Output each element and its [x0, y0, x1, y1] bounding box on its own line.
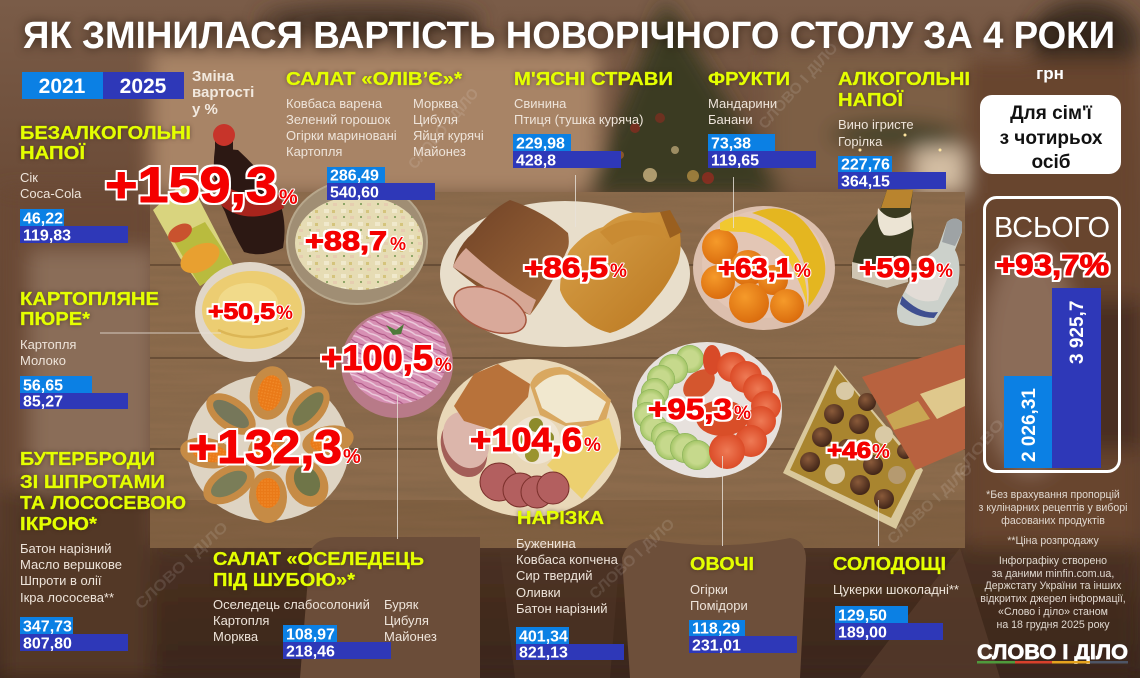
food: herring under fur coat bowl — [341, 310, 453, 418]
legend: change in percent: вартості — [192, 84, 254, 101]
panel: cold cuts: Сир твердий — [516, 568, 592, 583]
percent: vegetables +95,3: % — [734, 403, 751, 424]
percent: sweets +46: % — [872, 441, 890, 463]
panel: sweets: 129,50 — [838, 608, 887, 624]
panel: meat dishes — [513, 69, 673, 170]
panel: cold cuts: Батон нарізний — [516, 601, 608, 616]
panel: alcoholic drinks: НАПОЇ — [838, 90, 904, 110]
panel: total chart: +93,7% — [996, 250, 1109, 282]
percent: sweets +46 — [827, 437, 890, 463]
percent: olivier +88,7: +88,7 — [305, 226, 387, 256]
footnotes and sources: за даними minfin.com.ua, — [992, 568, 1114, 580]
panel: sandwiches: ЗІ ШПРОТАМИ — [20, 472, 165, 492]
panel: sandwiches: Ікра лососева** — [20, 590, 114, 605]
panel: olivier salad: Зелений горошок — [286, 112, 391, 127]
panel: herring salad: Оселедець слабосолоний — [213, 597, 370, 612]
panel: vegetables: 231,01 — [692, 638, 741, 654]
food: cola bottle — [212, 124, 285, 254]
panel: alcoholic drinks — [838, 69, 970, 190]
panel: fruit: ФРУКТИ — [708, 69, 790, 89]
panel: total chart — [984, 198, 1120, 472]
panel: total chart: ВСЬОГО — [994, 212, 1110, 244]
food: cold cuts platter — [432, 359, 621, 517]
percent: sweets +46: +46 — [827, 437, 871, 463]
panel: mashed potatoes: 85,27 — [23, 394, 63, 410]
panel: sandwiches: ІКРОЮ* — [20, 514, 97, 534]
footnotes and sources: Інфографіку створено — [999, 555, 1107, 567]
tree baubles and lights — [616, 113, 942, 184]
food: champagne bottle — [852, 190, 914, 288]
panel: alcoholic drinks: АЛКОГОЛЬНІ — [838, 69, 970, 89]
percent: meat +86,5: % — [610, 261, 627, 282]
panel: cold cuts: Буженина — [516, 536, 576, 551]
legend: years: 2021 — [39, 75, 86, 98]
panel: vegetables: 118,29 — [692, 620, 740, 638]
percent: fruit +63,1: % — [794, 261, 811, 282]
panel: alcoholic drinks: Вино ігристе — [838, 117, 914, 132]
panel: olivier salad: САЛАТ «ОЛІВ’Є»* — [286, 69, 462, 89]
panel: sweets: 189,00 — [838, 624, 887, 642]
percent: alcohol +59,9: +59,9 — [859, 253, 935, 283]
panel: mashed potatoes: Картопля — [20, 337, 76, 352]
panel: soft drinks: НАПОЇ — [20, 143, 86, 163]
panel: vegetables: ОВОЧІ — [690, 554, 754, 574]
panel: mashed potatoes: 56,65 — [23, 378, 63, 394]
percent: olivier +88,7: % — [390, 234, 406, 254]
chairs below the table — [300, 537, 1000, 678]
watermarks: Слово і діло — [132, 39, 1008, 613]
panel: olivier salad: Яйця курячі — [413, 128, 484, 143]
percent: soft drinks +159,3: % — [279, 186, 298, 209]
percent: fruit +63,1: +63,1 — [718, 253, 792, 283]
food: chocolate box — [783, 345, 965, 529]
percent: sandwiches +132,3: +132,3 — [188, 420, 342, 473]
panel: olivier salad: Картопля — [286, 144, 342, 159]
panel: vegetables: Огірки — [690, 582, 728, 597]
panel: sandwiches: БУТЕРБРОДИ — [20, 449, 155, 469]
panel: meat dishes: Свинина — [514, 96, 567, 111]
percent: meat +86,5: +86,5 — [524, 252, 608, 283]
percent: sandwiches +132,3: % — [343, 446, 361, 468]
panel: cold cuts: Оливки — [516, 585, 561, 600]
percent: herring salad +100,5: +100,5 — [321, 339, 433, 378]
panel: alcoholic drinks: Горілка — [838, 134, 883, 149]
watermarks: Слово і діло: СЛОВО І ДІЛО — [884, 460, 976, 548]
panel: herring salad: Морква — [213, 629, 259, 644]
panel: olivier salad: Майонез — [413, 144, 466, 159]
panel: sweets — [833, 554, 959, 642]
panel: sandwiches: Масло вершкове — [20, 557, 122, 572]
panel: herring salad: 108,97 — [286, 626, 335, 644]
footnotes and sources — [979, 489, 1127, 631]
panel: herring salad: Буряк — [384, 597, 419, 612]
unit label: грн — [1036, 64, 1064, 83]
footnotes and sources: фасованих продуктів — [1001, 515, 1105, 527]
card: for family of four: осіб — [1032, 152, 1070, 173]
panel: total chart: 3 925,7 — [1067, 301, 1088, 364]
title: ЯК ЗМІНИЛАСЯ ВАРТІСТЬ НОВОРІЧНОГО СТОЛУ ЗА 4 РОКИ — [23, 15, 1115, 57]
panel: mashed potatoes: КАРТОПЛЯНЕ — [20, 289, 159, 309]
footnotes and sources: *Без врахування пропорцій — [986, 489, 1120, 501]
panel: sandwiches — [20, 449, 186, 652]
legend: change in percent: у % — [192, 101, 218, 118]
table: wooden top — [150, 192, 965, 548]
panel: olivier salad: 286,49 — [330, 168, 379, 184]
panel: alcoholic drinks: 227,76 — [841, 156, 890, 174]
card: for family of four — [980, 95, 1121, 174]
panel: fruit: Банани — [708, 112, 753, 127]
food: vodka bottle — [897, 218, 962, 326]
panel: soft drinks: Coca-Cola — [20, 186, 82, 201]
food: juice carton — [153, 178, 233, 286]
footnotes and sources: «Слово і діло» станом — [998, 606, 1108, 618]
percent: mashed potatoes +50,5: +50,5 — [208, 299, 275, 324]
panel: olivier salad: Цибуля — [413, 112, 458, 127]
panel: sandwiches: Шпроти в олії — [20, 573, 102, 588]
watermarks: Слово і діло: СЛОВО — [950, 416, 1008, 481]
logo: Слово і діло: СЛОВО І ДІЛО — [977, 641, 1128, 664]
watermarks: Слово і діло: СЛОВО І ДІЛО — [755, 39, 842, 133]
leader lines — [100, 175, 878, 546]
panel: soft drinks — [20, 123, 191, 244]
panel: soft drinks: 119,83 — [23, 228, 71, 244]
panel: mashed potatoes — [20, 289, 159, 410]
panel: cold cuts — [516, 508, 624, 662]
panel: sandwiches: 807,80 — [23, 636, 72, 652]
watermarks: Слово і діло: СЛОВО І ДІЛО — [132, 518, 232, 613]
panel: herring salad: 218,46 — [286, 644, 335, 660]
panel: fruit: 73,38 — [711, 136, 751, 152]
percent: mashed potatoes +50,5 — [208, 299, 293, 324]
panel: cold cuts: Ковбаса копчена — [516, 552, 619, 567]
panel: meat dishes: 229,98 — [516, 136, 565, 152]
percent: herring salad +100,5: % — [435, 355, 452, 376]
panel: cold cuts: 401,34 — [519, 628, 568, 646]
footnotes and sources: Держстату України та інших — [985, 580, 1122, 592]
panel: olivier salad: 540,60 — [330, 184, 379, 202]
legend: years — [22, 72, 184, 99]
footnotes and sources: на 18 грудня 2025 року — [996, 619, 1110, 631]
food: canape plate — [178, 362, 357, 523]
card: for family of four: Для сім'ї — [1010, 103, 1093, 124]
footnotes and sources: відкритих джерел інформації, — [980, 593, 1126, 605]
panel: olivier salad: Ковбаса варена — [286, 96, 383, 111]
percent: soft drinks +159,3: +159,3 — [105, 157, 277, 213]
panel: soft drinks: БЕЗАЛКОГОЛЬНІ — [20, 123, 191, 143]
panel: cold cuts: НАРІЗКА — [517, 508, 604, 528]
percent: mashed potatoes +50,5: % — [276, 303, 293, 324]
panel: herring salad: Цибуля — [384, 613, 429, 628]
panel: mashed potatoes: ПЮРЕ* — [20, 309, 90, 329]
panel: herring salad: САЛАТ «ОСЕЛЕДЕЦЬ — [213, 549, 424, 569]
percent: alcohol +59,9: % — [936, 261, 953, 282]
panel: soft drinks: 46,22 — [23, 210, 63, 228]
legend: years: 2025 — [120, 75, 167, 98]
legend: change in percent: Зміна — [192, 68, 235, 85]
watermarks: Слово і діло: СЛОВО І ДІЛО — [405, 85, 483, 173]
panel: cold cuts: 821,13 — [519, 644, 568, 662]
panel: sweets: Цукерки шоколадні** — [833, 582, 959, 597]
panel: sandwiches: Батон нарізний — [20, 541, 112, 556]
panel: herring salad: Майонез — [384, 629, 437, 644]
panel: olivier salad: Морква — [413, 96, 459, 111]
panel: herring salad — [213, 549, 437, 660]
food: olivier salad bowl — [287, 180, 427, 304]
panel: sandwiches: ТА ЛОСОСЕВОЮ — [20, 493, 186, 513]
card: for family of four: з чотирьох — [1000, 128, 1103, 149]
panel: olivier salad — [286, 69, 484, 202]
percent: meat +86,5 — [524, 252, 627, 283]
panel: alcoholic drinks: 364,15 — [841, 174, 890, 190]
panel: herring salad: ПІД ШУБОЮ»* — [213, 570, 355, 590]
footnotes and sources: з кулінарних рецептів у виборі — [979, 502, 1127, 514]
percent: vegetables +95,3: +95,3 — [648, 394, 732, 426]
panel: mashed potatoes: Молоко — [20, 353, 66, 368]
panel: sandwiches: 347,73 — [23, 618, 72, 636]
panel: meat dishes: М'ЯСНІ СТРАВИ — [514, 69, 673, 89]
percent: olivier +88,7 — [305, 226, 406, 256]
panel: meat dishes: 428,8 — [516, 152, 556, 170]
percent: cold cuts +104,6: +104,6 — [470, 421, 582, 458]
panel: vegetables — [689, 554, 797, 654]
percent: cold cuts +104,6: % — [584, 435, 601, 456]
panel: fruit — [708, 69, 816, 170]
food: vegetable plate — [632, 342, 782, 478]
footnotes and sources: **Ціна розпродажу — [1007, 535, 1099, 547]
panel: soft drinks: Сік — [20, 170, 38, 185]
food: mashed potato bowl — [195, 262, 305, 362]
panel: fruit: 119,65 — [711, 152, 759, 170]
panel: herring salad: Картопля — [213, 613, 269, 628]
food: fruit bowl — [693, 206, 835, 330]
watermarks: Слово і діло: СЛОВО І ДІЛО — [586, 515, 678, 603]
panel: total chart: 2 026,31 — [1019, 388, 1040, 462]
panel: sweets: СОЛОДОЩІ — [833, 554, 946, 574]
panel: fruit: Мандарини — [708, 96, 777, 111]
panel: olivier salad: Огірки мариновані — [286, 128, 397, 143]
food: roast pork and chicken platter — [440, 200, 690, 347]
panel: meat dishes: Птиця (тушка куряча) — [514, 112, 643, 127]
panel: vegetables: Помідори — [690, 598, 748, 613]
